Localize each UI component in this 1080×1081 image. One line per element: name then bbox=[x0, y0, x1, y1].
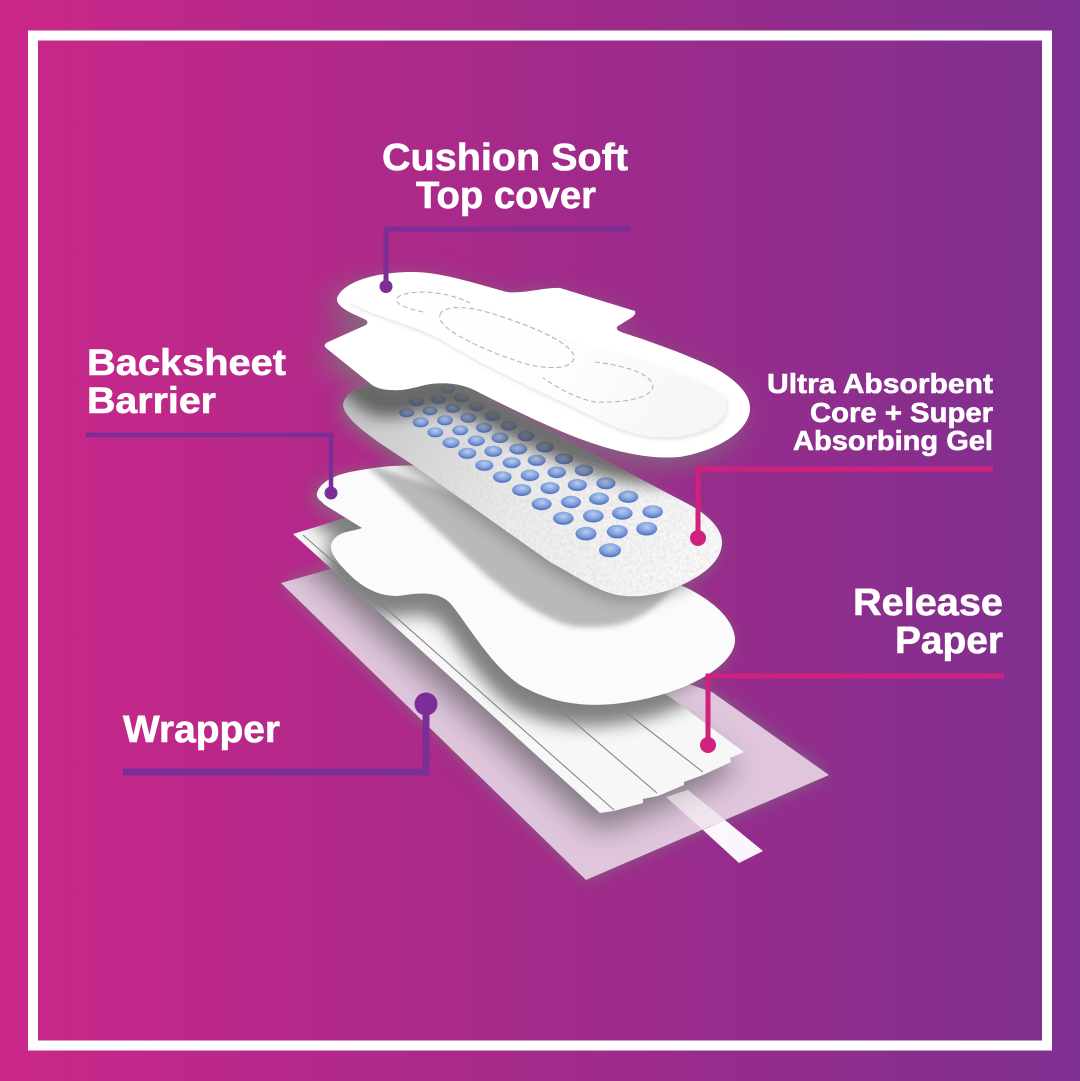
gel dots bbox=[399, 384, 663, 557]
callout: release paper bbox=[700, 582, 1004, 753]
callout: backsheet barrier bbox=[86, 342, 338, 500]
exploded pad diagram bbox=[281, 272, 829, 880]
top cover layer bbox=[317, 272, 750, 466]
callout: backsheet barrier: Barrier bbox=[87, 380, 216, 421]
callout: absorbent core and gel: Ultra Absorbent bbox=[767, 368, 993, 399]
callout: cushion soft top cover: Top cover bbox=[416, 175, 596, 217]
callout: wrapper: Wrapper bbox=[123, 709, 280, 751]
wrapper layer bbox=[281, 534, 829, 880]
stitched dashes bbox=[397, 292, 653, 402]
callout: backsheet barrier: Backsheet bbox=[87, 342, 286, 383]
callout: cushion soft top cover bbox=[380, 137, 631, 293]
raised cushion area bbox=[350, 292, 728, 439]
callout: cushion soft top cover: Cushion Soft bbox=[382, 137, 628, 179]
callout: absorbent core and gel: Absorbing Gel bbox=[793, 425, 993, 456]
callout: wrapper bbox=[123, 692, 438, 772]
absorbent core layer bbox=[333, 383, 725, 608]
callout: absorbent core and gel bbox=[690, 368, 993, 546]
callout: absorbent core and gel: Core + Super bbox=[810, 397, 993, 428]
backsheet layer bbox=[312, 462, 735, 708]
release paper layer bbox=[293, 487, 744, 813]
release strip bbox=[666, 790, 763, 863]
callout: release paper: Paper bbox=[895, 620, 1003, 662]
callout: release paper: Release bbox=[853, 582, 1003, 624]
